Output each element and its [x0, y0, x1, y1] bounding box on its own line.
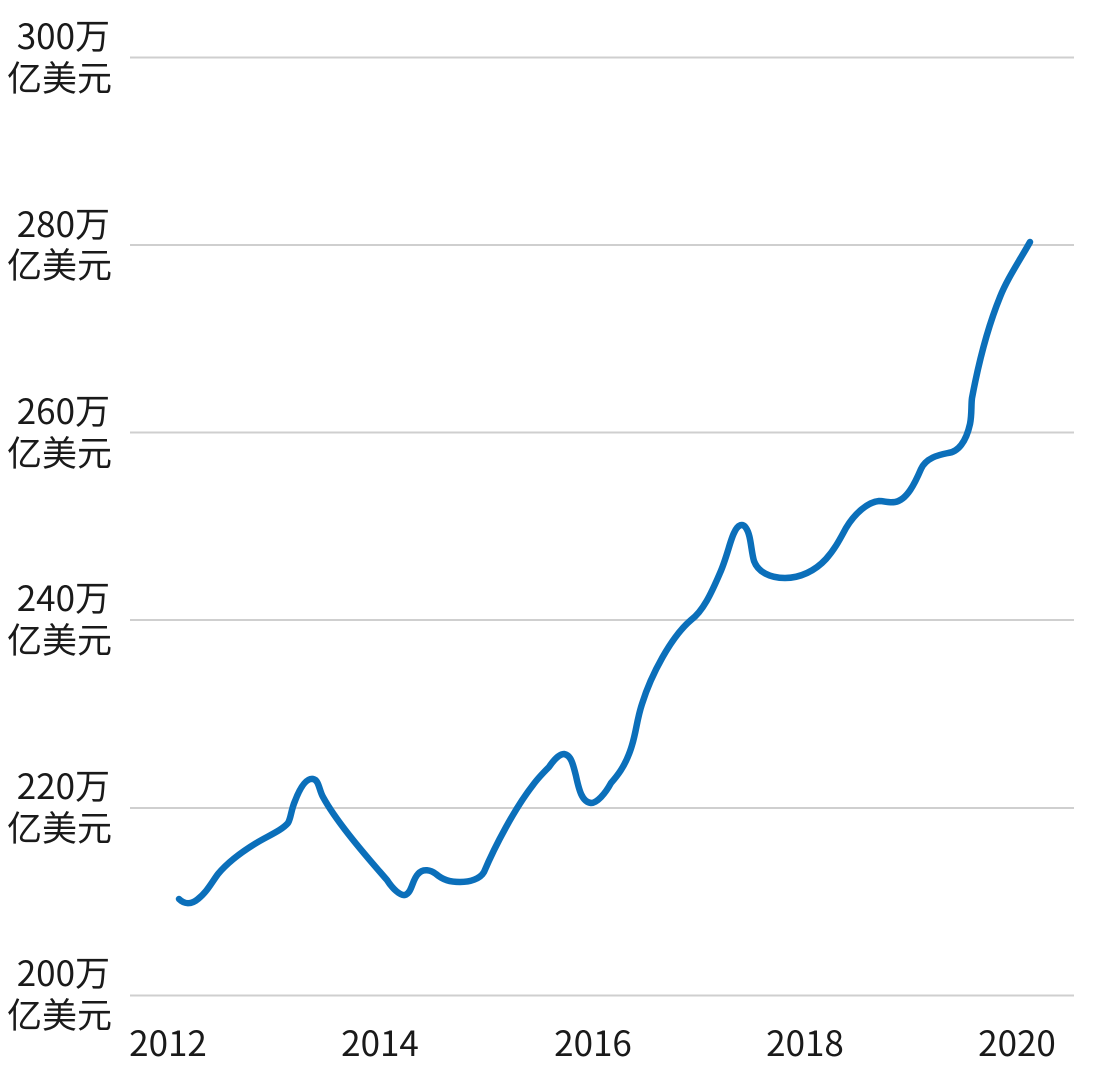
- y axis labels: 240万: [17, 571, 110, 622]
- y axis labels: 260万: [17, 384, 110, 435]
- y axis labels: 亿美元: [7, 51, 112, 102]
- x axis labels: 2014: [341, 1016, 419, 1067]
- x axis labels: [129, 1016, 1056, 1067]
- y axis labels: 300万: [17, 9, 110, 60]
- data line: [179, 242, 1030, 903]
- y axis labels: [7, 9, 112, 1039]
- y axis labels: 200万: [17, 946, 110, 997]
- y axis labels: 亿美元: [7, 801, 112, 852]
- x axis labels: 2018: [766, 1016, 844, 1067]
- y axis labels: 亿美元: [7, 613, 112, 664]
- y axis labels: 亿美元: [7, 426, 112, 477]
- y axis labels: 亿美元: [7, 238, 112, 289]
- y axis labels: 280万: [17, 197, 110, 248]
- x axis labels: 2012: [129, 1016, 207, 1067]
- x axis labels: 2016: [554, 1016, 632, 1067]
- x axis labels: 2020: [978, 1016, 1056, 1067]
- y axis labels: 220万: [17, 759, 110, 810]
- y axis labels: 亿美元: [7, 988, 112, 1039]
